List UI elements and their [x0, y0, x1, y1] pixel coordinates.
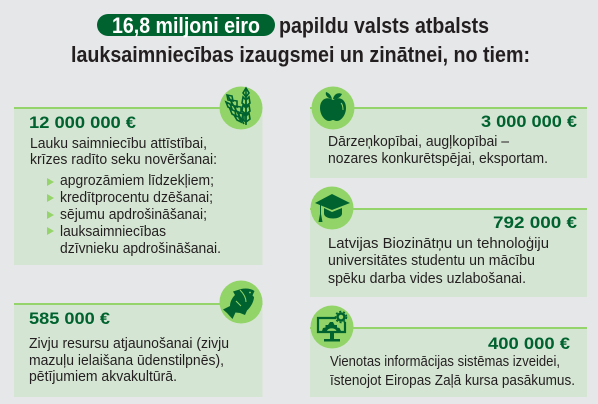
panel: 12 000 000	[14, 86, 262, 265]
panel: 3 000 000	[310, 86, 587, 178]
icon: wheat	[220, 86, 262, 130]
title line two: lauksaimniecības izaugsmei un zinātnei, no tiem:	[71, 42, 530, 67]
icon: apple	[312, 86, 354, 130]
description: Latvijas Biozinātņu un tehnoloģiju	[328, 235, 549, 252]
description: Vienotas informācijas sistēmas izveidei,	[330, 353, 560, 370]
bullet list: sējumu apdrošināšanai;	[60, 206, 207, 223]
bullet list: lauksaimniecības	[60, 223, 166, 240]
description: Zivju resursu atjaunošanai (zivju	[29, 335, 229, 352]
bullet list: apgrozāmiem līdzekļiem;	[60, 172, 214, 189]
title pill	[97, 14, 275, 36]
panel: 792 000: spēku darba vides uzlabošanai.	[328, 270, 526, 287]
amount: 400 000 €	[488, 334, 571, 353]
title pill text: 16,8 miljoni eiro	[112, 13, 260, 38]
panel: 12 000 000: krīzes radīto seku novēršanai:	[30, 151, 217, 168]
amount: 12 000 000 €	[29, 113, 137, 132]
panel: 585 000: mazuļu ielaišana ūdenstilpnēs),	[29, 352, 224, 369]
amount: 792 000 €	[493, 213, 578, 232]
icon: graduation cap	[310, 186, 354, 230]
panel: 585 000: pētījumiem akvakultūrā.	[29, 368, 177, 385]
bullet list	[47, 172, 221, 257]
panel: 792 000	[310, 186, 587, 297]
panel: 400 000	[310, 306, 587, 397]
title line one: papildu valsts atbalsts	[279, 13, 489, 38]
amount: 585 000 €	[29, 309, 111, 328]
panel: 585 000	[14, 280, 262, 397]
icon: monitor with gears	[310, 306, 354, 348]
bullet list: dzīvnieku apdrošināšanai.	[60, 240, 221, 257]
amount: 3 000 000 €	[481, 112, 578, 131]
icon: fish	[220, 280, 262, 324]
description: Lauku saimniecību attīstībai,	[30, 135, 207, 152]
bullet list: kredītprocentu dzēšanai;	[60, 189, 213, 206]
title	[71, 13, 530, 67]
panel: 400 000: īstenojot Eiropas Zaļā kursa pasākumus.	[330, 372, 575, 389]
panel: 3 000 000: nozares konkurētspējai, eksportam.	[328, 150, 548, 167]
description: Dārzeņkopībai, augļkopībai –	[328, 133, 510, 150]
panel: 792 000: universitātes studentu un mācību	[328, 252, 535, 269]
